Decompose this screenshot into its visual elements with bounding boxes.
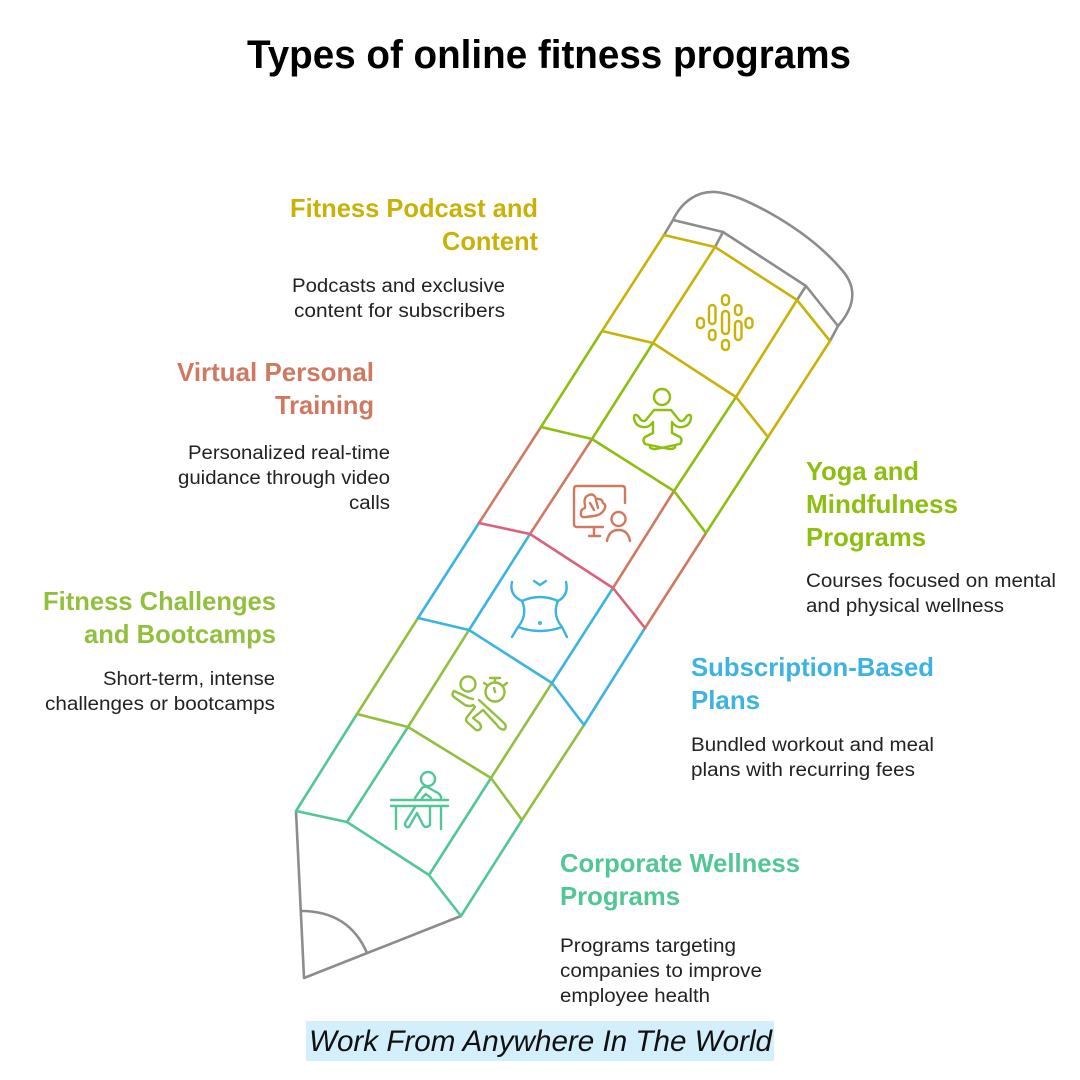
text: challenges description: challenges or bootcamps	[45, 694, 275, 715]
boundary: pink	[479, 523, 645, 628]
segment: yellow	[602, 235, 830, 437]
text: corporate description: employee health	[560, 986, 710, 1007]
label: Fitness Podcast and Content	[290, 193, 538, 256]
label: Yoga and Mindfulness Programs	[806, 456, 958, 552]
footer banner: Work From Anywhere In The World	[309, 1025, 773, 1058]
label: Fitness Podcast and Content: Content	[442, 226, 538, 256]
text: subscription description	[691, 735, 934, 781]
label: Fitness Challenges and Bootcamps	[43, 586, 276, 649]
icon: video trainer	[574, 486, 630, 541]
segment: lime	[357, 618, 584, 820]
label: Virtual Personal Training: Virtual Personal	[177, 357, 374, 387]
label: Yoga and Mindfulness Programs: Yoga and	[806, 456, 919, 486]
segment: green	[541, 331, 768, 533]
icon: person at desk	[391, 772, 448, 829]
text: yoga description	[806, 571, 1056, 617]
text: yoga description: and physical wellness	[806, 596, 1004, 617]
text: podcast description	[292, 276, 505, 322]
label: Yoga and Mindfulness Programs: Programs	[806, 522, 926, 552]
label: Virtual Personal Training	[177, 357, 374, 420]
text: yoga description: Courses focused on mental	[806, 571, 1056, 592]
text: podcast description: Podcasts and exclusive	[292, 276, 505, 297]
text: personal training description	[178, 443, 390, 514]
pencil eraser cap	[664, 192, 852, 341]
text: corporate description: Programs targeting	[560, 936, 736, 957]
text: personal training description: calls	[349, 493, 390, 514]
icon: waist	[511, 581, 567, 637]
text: subscription description: Bundled workout and meal	[691, 735, 934, 756]
pencil diagram	[296, 192, 852, 978]
label: Yoga and Mindfulness Programs: Mindfulness	[806, 489, 958, 519]
text: personal training description: Personalized real-time	[188, 443, 390, 464]
title: Types of online fitness programs	[247, 33, 851, 77]
text: challenges description	[45, 669, 275, 715]
label: Corporate Wellness Programs	[560, 848, 800, 911]
text: corporate description	[560, 936, 762, 1007]
text: podcast description: content for subscribers	[294, 301, 505, 322]
label: Virtual Personal Training: Training	[275, 390, 374, 420]
label: Fitness Challenges and Bootcamps: and Bootcamps	[84, 619, 276, 649]
pencil tip	[296, 811, 461, 978]
segment: teal	[296, 714, 522, 916]
icon: podcast	[697, 295, 752, 350]
text: subscription description: plans with recurring fees	[691, 760, 915, 781]
label: Corporate Wellness Programs: Corporate Wellness	[560, 848, 800, 878]
label: Subscription-Based Plans	[691, 652, 934, 715]
label: Subscription-Based Plans: Plans	[691, 685, 760, 715]
segment: salmon	[479, 427, 706, 628]
label: Corporate Wellness Programs: Programs	[560, 881, 680, 911]
icon: runner with stopwatch	[452, 676, 507, 730]
label: Fitness Challenges and Bootcamps: Fitness Challenges	[43, 586, 276, 616]
segment: blue	[418, 523, 645, 725]
text: personal training description: guidance through video	[178, 468, 390, 489]
label: Fitness Podcast and Content: Fitness Podcast and	[290, 193, 538, 223]
text: corporate description: companies to improve	[560, 961, 762, 982]
label: Subscription-Based Plans: Subscription-Based	[691, 652, 934, 682]
icon: yoga	[634, 389, 691, 449]
text: challenges description: Short-term, intense	[103, 669, 275, 690]
